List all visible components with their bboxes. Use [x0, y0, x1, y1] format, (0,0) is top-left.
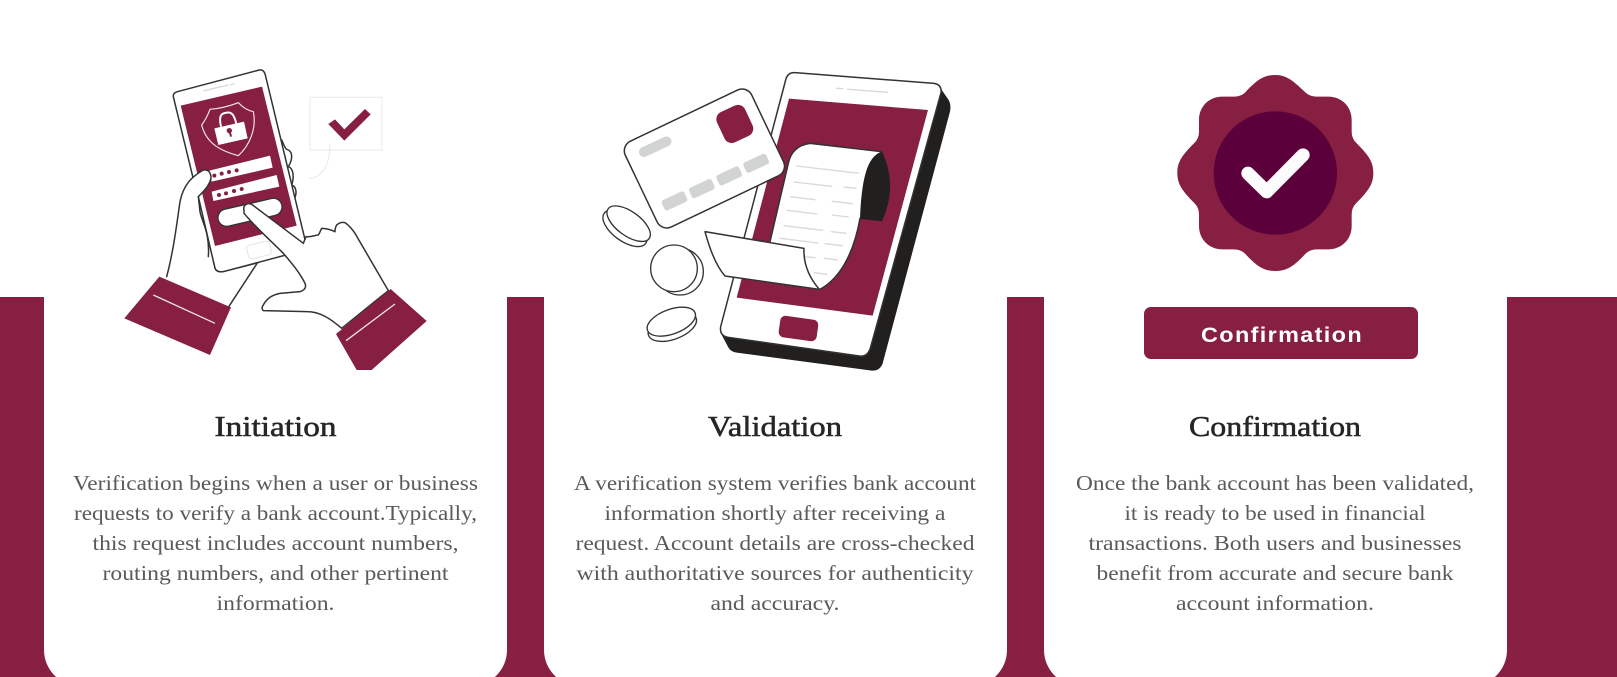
- text block: confirmation: transactions. Both users and businesses: [1088, 531, 1462, 555]
- heading: confirmation: Confirmation: [1189, 411, 1362, 443]
- text block: confirmation: it is ready to be used in financial: [1124, 501, 1426, 525]
- text block: confirmation: account information.: [1176, 591, 1374, 615]
- text block: validation: request. Account details are cross-checked: [576, 531, 975, 555]
- icon: hands holding phone: [124, 70, 427, 370]
- confirmation button: [1144, 307, 1418, 359]
- coins: [597, 199, 703, 347]
- heading: initiation: Initiation: [214, 411, 337, 443]
- icon: phone with card, receipt and coins: [597, 73, 950, 371]
- icon: confirmation badge: [1177, 75, 1373, 271]
- text block: validation: and accuracy.: [710, 591, 840, 615]
- phone screen: [737, 99, 928, 316]
- right cuff: [336, 289, 427, 370]
- text block: validation: with authoritative sources for authenticity: [576, 561, 974, 585]
- phone home button: [246, 241, 272, 259]
- icon: phone body: [173, 70, 307, 272]
- payment card: [621, 85, 788, 231]
- phone shadow side: [720, 85, 950, 371]
- icon: shield and lock: [202, 103, 254, 156]
- left cuff: [124, 277, 231, 355]
- text block: initiation: [73, 471, 478, 615]
- callout: check mark: [309, 97, 382, 178]
- background band: [0, 297, 1617, 677]
- text block: initiation: this request includes account numbers,: [92, 531, 458, 555]
- text block: initiation: routing numbers, and other pertinent: [102, 561, 449, 585]
- text block: confirmation: benefit from accurate and secure bank: [1096, 561, 1454, 585]
- text block: validation: information shortly after receiving a: [604, 501, 946, 525]
- login fields: [209, 156, 279, 201]
- panel: initiation: [44, 297, 507, 677]
- text block: initiation: information.: [216, 591, 334, 615]
- right hand: [244, 204, 388, 328]
- confirmation button: Confirmation: [1201, 324, 1363, 347]
- text block: initiation: requests to verify a bank account.Typically,: [74, 501, 477, 525]
- left hand: [167, 170, 258, 307]
- text block: validation: [574, 471, 976, 615]
- heading: validation: Validation: [708, 411, 843, 443]
- icon: fingers behind phone: [282, 140, 296, 197]
- text block: confirmation: Once the bank account has been validated,: [1076, 471, 1474, 495]
- panel: confirmation: [1044, 297, 1507, 677]
- phone face: [720, 73, 941, 356]
- text block: confirmation: [1076, 471, 1474, 615]
- text block: validation: A verification system verifies bank account: [574, 471, 976, 495]
- phone screen: [181, 87, 297, 246]
- phone home button: [778, 315, 819, 342]
- login button: [216, 197, 284, 228]
- text block: initiation: Verification begins when a user or business: [73, 471, 478, 495]
- receipt: [705, 143, 890, 289]
- panel: validation: [544, 297, 1007, 677]
